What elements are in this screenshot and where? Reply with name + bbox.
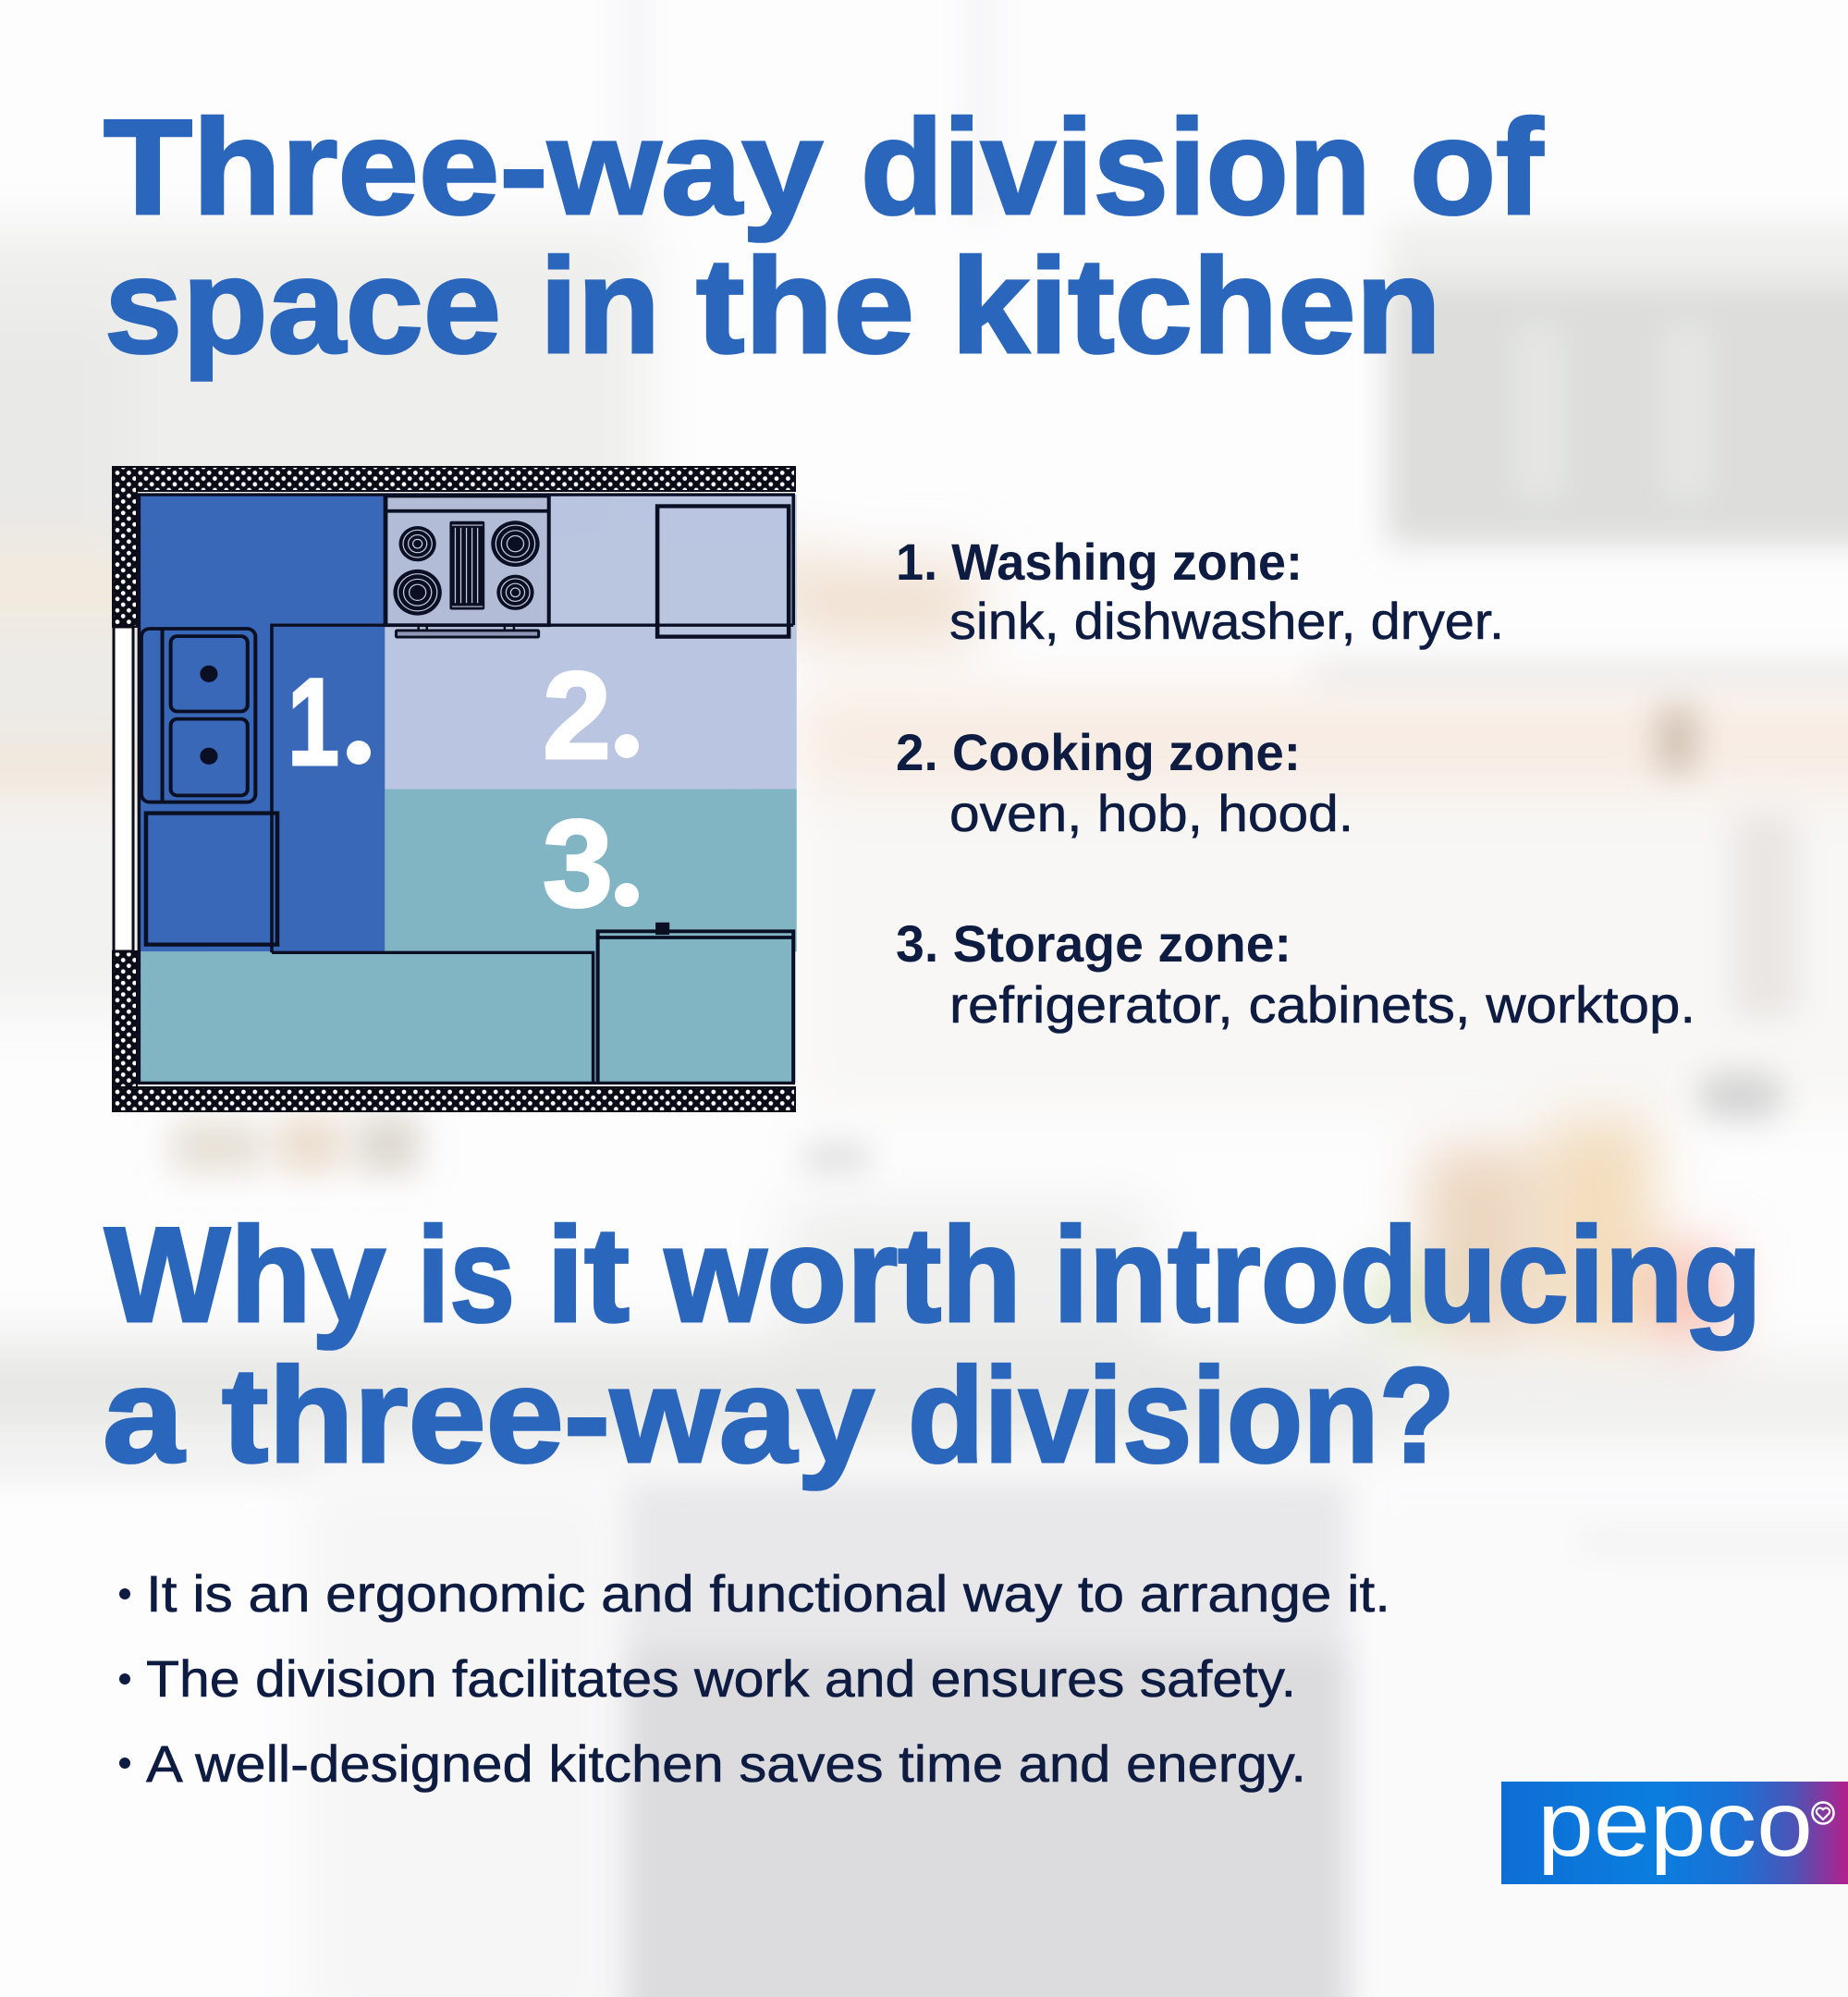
title: why three-way division — [103, 1199, 1762, 1490]
hob — [386, 496, 549, 637]
bullet three: A well-designed kitchen saves time and energy. — [146, 1734, 1306, 1793]
bullet one: It is an ergonomic and functional way to arrange it. — [146, 1564, 1390, 1623]
pepco logo — [1501, 1772, 1848, 1884]
pepco logo: pepco — [1537, 1772, 1813, 1876]
cooking zone: oven, hob, hood. — [949, 784, 1353, 842]
title: why three-way division: worth — [664, 1199, 1022, 1350]
title: three-way division: of — [1410, 92, 1543, 242]
title: three-way division: the — [696, 230, 914, 381]
benefits bullet list — [119, 1564, 1390, 1793]
cooking zone: 2. Cooking zone: — [896, 723, 1301, 781]
title: why three-way division: a — [103, 1340, 186, 1490]
washing zone — [896, 533, 1504, 650]
number 3: 3 — [543, 795, 613, 933]
title: why three-way division: three-way — [222, 1340, 875, 1490]
zone 3 area: storage — [139, 789, 797, 1083]
zone 2 area: cooking — [385, 495, 797, 789]
title: three-way division — [104, 92, 1543, 381]
kitchen floor plan diagram — [113, 467, 797, 1111]
zone legend list — [896, 533, 1695, 1034]
bullet two: The division facilitates work and ensures safety. — [146, 1649, 1296, 1708]
title: why three-way division: is — [417, 1199, 515, 1350]
title: why three-way division: division? — [908, 1340, 1455, 1490]
title: why three-way division: Why — [104, 1199, 386, 1350]
title: why three-way division: it — [546, 1199, 630, 1350]
zone numbers — [288, 647, 639, 933]
title: three-way division: division — [861, 92, 1371, 242]
title: why three-way division: introducing — [1053, 1199, 1762, 1350]
sink — [141, 629, 255, 802]
number 2: 2 — [543, 647, 611, 785]
dishwasher — [146, 814, 277, 945]
washing zone: sink, dishwasher, dryer. — [949, 592, 1504, 650]
title: three-way division: in — [540, 230, 660, 381]
washing zone: 1. Washing zone: — [896, 533, 1303, 591]
icon: registered heart — [1812, 1803, 1834, 1823]
storage zone — [896, 914, 1695, 1034]
counter outlines — [139, 495, 793, 1083]
zone colours and fixtures — [139, 495, 797, 1083]
number 1: 1 — [288, 654, 339, 791]
title: three-way division: kitchen — [951, 230, 1441, 381]
zone 1 area: washing — [139, 495, 385, 951]
storage zone: 3. Storage zone: — [896, 914, 1291, 973]
title: three-way division: space — [104, 230, 501, 381]
storage zone: refrigerator, cabinets, worktop. — [949, 975, 1695, 1034]
base cabinet — [598, 925, 793, 1083]
cooking zone — [896, 723, 1353, 842]
walls — [113, 467, 795, 1111]
fridge cabinet — [657, 506, 789, 637]
title: three-way division: Three-way — [104, 92, 823, 242]
